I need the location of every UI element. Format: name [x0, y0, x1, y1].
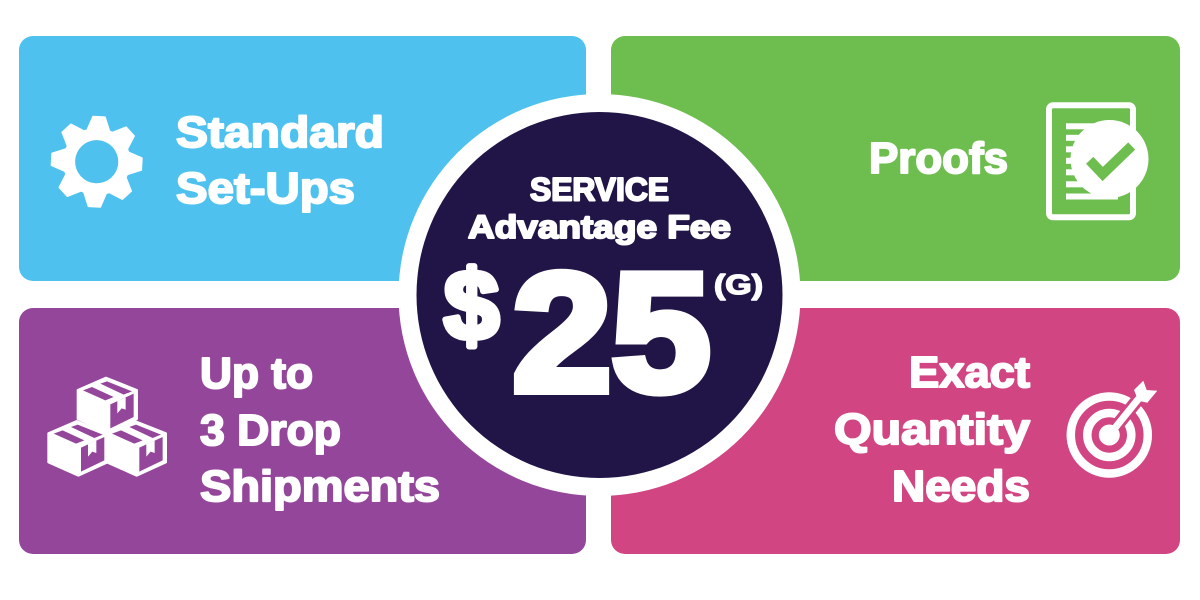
label: proofs: Proofs	[869, 134, 1008, 183]
icon: stacked boxes	[48, 378, 166, 476]
panel: standard set-ups	[19, 36, 586, 281]
icon: checked document	[1049, 105, 1148, 217]
icon: gear	[49, 114, 144, 209]
label: up to 3 drop shipments: Up to	[200, 349, 313, 398]
panel: up to 3 drop shipments	[19, 308, 586, 554]
label: standard set-ups: Set-Ups	[176, 164, 355, 213]
label: up to 3 drop shipments: Shipments	[200, 462, 440, 511]
label: up to 3 drop shipments: 3 Drop	[200, 406, 341, 455]
badge heading	[468, 172, 731, 245]
panel: proofs	[611, 36, 1180, 281]
label: standard set-ups	[176, 108, 384, 213]
price: $25: 25	[512, 238, 710, 426]
icon: target with arrow	[1071, 381, 1157, 474]
badge heading: SERVICE	[530, 172, 669, 208]
price: $25: $	[444, 250, 499, 360]
label: exact quantity needs	[834, 348, 1031, 511]
label: exact quantity needs: Needs	[892, 462, 1030, 511]
central badge	[398, 94, 800, 496]
label: standard set-ups: Standard	[176, 108, 384, 157]
label: exact quantity needs: Quantity	[834, 405, 1031, 454]
panel: exact quantity needs	[611, 308, 1180, 554]
label: up to 3 drop shipments	[200, 349, 440, 511]
badge heading: Advantage Fee	[468, 209, 731, 245]
label: exact quantity needs: Exact	[909, 348, 1030, 397]
superscript: (G): (G)	[714, 269, 763, 300]
